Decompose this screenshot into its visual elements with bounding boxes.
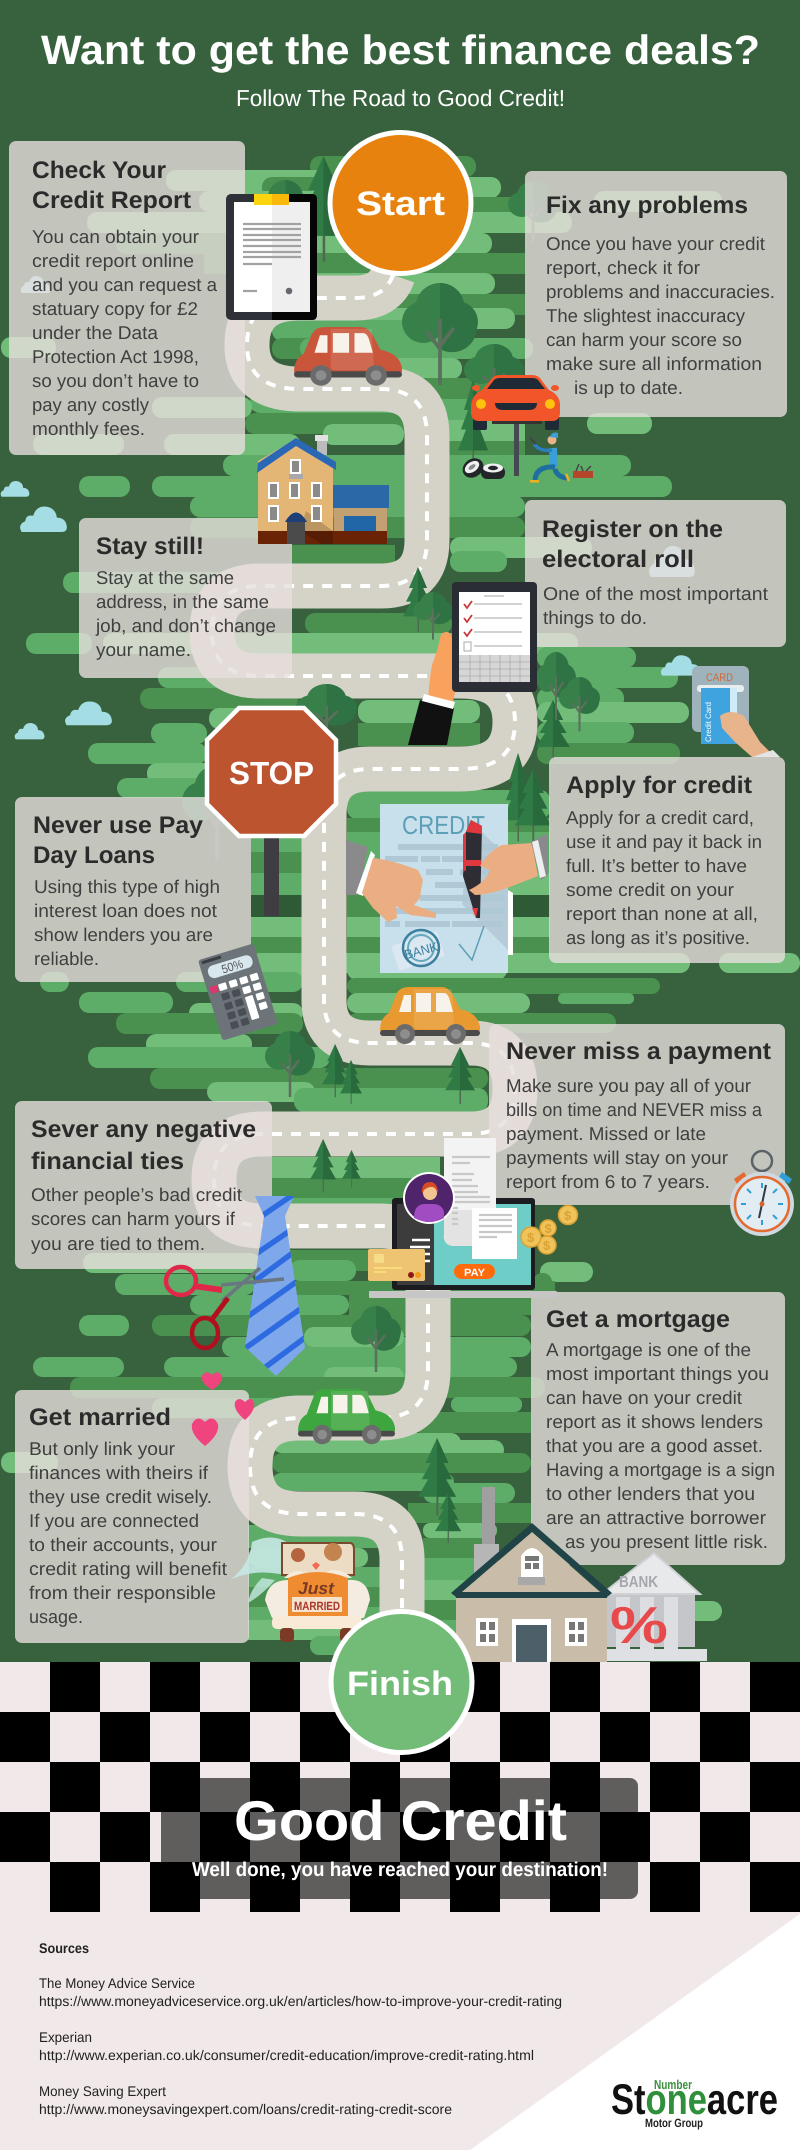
- panel: apply for credit: [549, 757, 785, 963]
- icon: credit card and hand: Credit Card: [704, 702, 713, 742]
- panel: get married: usage.: [29, 1606, 83, 1627]
- panel: check your credit report: monthly fees.: [32, 418, 145, 439]
- icon: hearts: [192, 1372, 254, 1446]
- icon: tablet and hand: [408, 582, 537, 745]
- icon: just married car: Just: [298, 1579, 335, 1598]
- panel: get a mortgage: as you present little risk.: [565, 1531, 768, 1552]
- icon: credit document with hands: [346, 804, 548, 973]
- panel: fix any problems: is up to date.: [574, 377, 683, 398]
- sources: http://www.experian.co.uk/consumer/credit-education/improve-credit-rating.html: [39, 2047, 534, 2063]
- panel: apply for credit: Apply for a credit card,: [566, 807, 754, 828]
- icon: calculator: [198, 943, 278, 1041]
- sources: Experian: [39, 2029, 92, 2045]
- start marker: Start: [356, 185, 445, 223]
- panel: fix any problems: can harm your score so: [546, 329, 742, 350]
- panel: check your credit report: Protection Act 1998,: [32, 346, 199, 367]
- panel: check your credit report: so you don’t have to: [32, 370, 199, 391]
- sources: [39, 1940, 562, 2117]
- logo: stoneacre: Number: [654, 2077, 692, 2092]
- clouds: [1, 276, 700, 739]
- white corner: [470, 1914, 800, 2150]
- panel: get married: to their accounts, your: [29, 1534, 217, 1555]
- panel: get married: credit rating will benefit: [29, 1558, 227, 1579]
- panel: get a mortgage: to other lenders that you: [546, 1483, 755, 1504]
- panel: get a mortgage: [531, 1292, 785, 1565]
- heading: Want to get the best finance deals?: [41, 27, 760, 73]
- icon: tie: [245, 1196, 305, 1376]
- panel: check your credit report: under the Data: [32, 322, 159, 343]
- panel: register on the electoral roll: [525, 500, 786, 647]
- panel: check your credit report: Credit Report: [32, 187, 191, 214]
- icon: orange car on lift: [471, 375, 560, 476]
- panel: never miss a payment: Make sure you pay all of your: [506, 1075, 751, 1096]
- panel: stay still: Stay still!: [96, 533, 204, 560]
- sources: https://www.moneyadviceservice.org.uk/en/articles/how-to-improve-your-credit-rating: [39, 1993, 562, 2009]
- sources: The Money Advice Service: [39, 1975, 195, 1991]
- sources: http://www.moneysavingexpert.com/loans/credit-rating-credit-score: [39, 2101, 452, 2117]
- panel: stay still: [79, 518, 292, 678]
- panel: get married: But only link your: [29, 1438, 175, 1459]
- panel: fix any problems: Once you have your credit: [546, 233, 765, 254]
- panel: never use pay day loans: Day Loans: [33, 842, 155, 869]
- icon: laptop payment: PAY: [464, 1267, 485, 1279]
- panel: check your credit report: pay any costly: [32, 394, 150, 415]
- icon: credit document with hands: BANK: [403, 939, 440, 962]
- panel: never miss a payment: payments will stay on your: [506, 1147, 728, 1168]
- icon: coins: $: [564, 1208, 572, 1223]
- panel: fix any problems: [525, 171, 787, 417]
- panel: get a mortgage: are an attractive borrower: [546, 1507, 766, 1528]
- panel: never miss a payment: Never miss a payment: [506, 1038, 771, 1065]
- panel: never use pay day loans: show lenders you are: [34, 924, 213, 945]
- start marker: [330, 132, 471, 274]
- panel: get a mortgage: most important things you: [546, 1363, 769, 1384]
- panel: sever any negative financial ties: [15, 1101, 272, 1269]
- sources: Money Saving Expert: [39, 2083, 166, 2099]
- icon: coins: $: [544, 1221, 552, 1236]
- panel: fix any problems: The slightest inaccuracy: [546, 305, 746, 326]
- finish marker: [331, 1612, 472, 1752]
- panel: fix any problems: report, check it for: [546, 257, 700, 278]
- icon: house: [451, 1487, 612, 1662]
- panel: get a mortgage: Get a mortgage: [546, 1306, 730, 1333]
- icon: bank: [602, 1553, 707, 1661]
- road: [212, 275, 515, 1620]
- panel: stay still: Stay at the same: [96, 567, 234, 588]
- panel: never use pay day loans: Never use Pay: [33, 812, 204, 839]
- panel: get married: from their responsible: [29, 1582, 216, 1603]
- panel: apply for credit: Apply for credit: [566, 772, 752, 799]
- icon: green car: [298, 1389, 395, 1444]
- panel: check your credit report: statuary copy for £2: [32, 298, 198, 319]
- icon: yellow car: [380, 987, 480, 1044]
- icon: credit document with hands: CREDIT: [402, 810, 485, 840]
- panel: register on the electoral roll: One of the most important: [543, 583, 768, 604]
- panel: get married: If you are connected: [29, 1510, 199, 1531]
- panel: get a mortgage: Having a mortgage is a sign: [546, 1459, 775, 1480]
- panel: apply for credit: full. It’s better to have: [566, 855, 747, 876]
- panel: register on the electoral roll: electoral roll: [542, 546, 694, 573]
- icon: scissors: [166, 1267, 284, 1348]
- icon: bank: BANK: [619, 1574, 658, 1591]
- icon: clipboard: [226, 194, 317, 320]
- icon: bank: %: [610, 1597, 668, 1655]
- icon: stop sign: STOP: [229, 755, 314, 791]
- panel: never miss a payment: report from 6 to 7 years.: [506, 1171, 710, 1192]
- icon: credit card and hand: CARD: [706, 672, 733, 684]
- panel: register on the electoral roll: things to do.: [543, 607, 647, 628]
- icon: just married car: [230, 1538, 370, 1642]
- panel: get a mortgage: can have on your credit: [546, 1387, 742, 1408]
- icon: stopwatch: [730, 1151, 794, 1236]
- panel: stay still: job, and don’t change: [95, 615, 276, 636]
- panel: get a mortgage: that you are a good asset.: [546, 1435, 763, 1456]
- finish marker: Finish: [347, 1665, 453, 1703]
- panel: get married: Get married: [29, 1404, 171, 1431]
- panel: never use pay day loans: interest loan does not: [34, 900, 217, 921]
- panel: sever any negative financial ties: scores can harm yours if: [31, 1208, 236, 1229]
- panel: fix any problems: make sure all information: [546, 353, 762, 374]
- panel: apply for credit: use it and pay it back in: [566, 831, 762, 852]
- panel: check your credit report: and you can request a: [32, 274, 218, 295]
- panel: check your credit report: Check Your: [32, 157, 166, 184]
- icon: coins: $: [527, 1230, 535, 1245]
- icon: house with garage: [257, 435, 389, 544]
- icon: laptop payment: [368, 1138, 557, 1298]
- panel: stay still: address, in the same: [96, 591, 269, 612]
- subtitle: Follow The Road to Good Credit!: [236, 85, 565, 111]
- panel: fix any problems: problems and inaccuracies.: [546, 281, 775, 302]
- landscape stripes: [1, 156, 800, 1655]
- trees: [182, 156, 600, 1543]
- sources: Sources: [39, 1940, 89, 1956]
- logo: stoneacre: Motor Group: [645, 2116, 703, 2130]
- icon: mechanic: [530, 432, 569, 482]
- icon: toolbox: [573, 464, 593, 478]
- panel: never use pay day loans: reliable.: [34, 948, 99, 969]
- panel: apply for credit: report than none at all,: [566, 903, 758, 924]
- panel: never miss a payment: payment. Missed or late: [506, 1123, 706, 1144]
- good credit banner: Good Credit: [234, 1789, 567, 1852]
- panel: get married: [15, 1390, 249, 1643]
- panel: sever any negative financial ties: Sever any negative: [31, 1116, 256, 1143]
- icon: red car: [294, 327, 402, 386]
- panel: check your credit report: [9, 141, 245, 455]
- panel: apply for credit: some credit on your: [566, 879, 734, 900]
- panel: never use pay day loans: [15, 797, 251, 982]
- panel: get married: they use credit wisely.: [29, 1486, 212, 1507]
- panel: apply for credit: as long as it’s positive.: [566, 927, 750, 948]
- logo: stoneacre: Stoneacre: [611, 2076, 778, 2124]
- panel: stay still: your name.: [96, 639, 191, 660]
- panel: check your credit report: credit report online: [32, 250, 194, 271]
- panel: never miss a payment: bills on time and NEVER miss a: [506, 1099, 763, 1120]
- good credit banner: [161, 1778, 638, 1899]
- panel: check your credit report: You can obtain your: [32, 226, 199, 247]
- icon: credit card and hand: [692, 666, 780, 757]
- icon: coins: [521, 1206, 578, 1254]
- panel: never use pay day loans: Using this type of high: [34, 876, 220, 897]
- panel: get married: finances with theirs if: [29, 1462, 209, 1483]
- checkered finish: [0, 1662, 800, 2150]
- icon: just married car: MARRIED: [294, 1599, 340, 1613]
- panel: never miss a payment: [489, 1024, 785, 1205]
- icon: coins: $: [543, 1238, 551, 1253]
- panel: fix any problems: Fix any problems: [546, 192, 748, 219]
- good credit banner: Well done, you have reached your destination!: [192, 1859, 608, 1881]
- icon: calculator: 50%: [220, 957, 245, 976]
- panel: register on the electoral roll: Register on the: [542, 516, 723, 543]
- panel: sever any negative financial ties: financial ties: [31, 1148, 184, 1175]
- panel: sever any negative financial ties: Other people’s bad credit: [31, 1184, 242, 1205]
- icon: tyres: [459, 454, 505, 482]
- icon: stop sign: [207, 708, 336, 916]
- panel: get a mortgage: report as it shows lenders: [546, 1411, 763, 1432]
- panel: sever any negative financial ties: you are tied to them.: [31, 1233, 205, 1254]
- panel: get a mortgage: A mortgage is one of the: [546, 1339, 751, 1360]
